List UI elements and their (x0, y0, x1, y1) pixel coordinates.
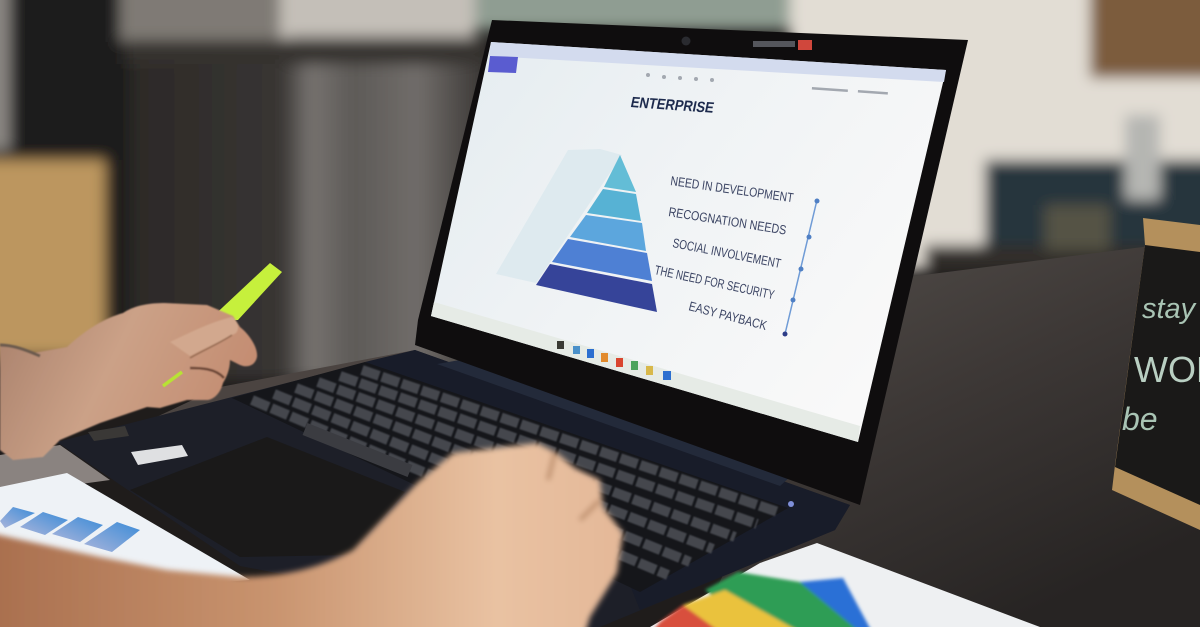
pyramid labels: NEED IN DEVELOPMENT (670, 173, 795, 205)
slide title: ENTERPRISE (629, 94, 716, 117)
left hand (0, 303, 257, 460)
space bar (305, 429, 410, 471)
webcam strip (682, 36, 812, 50)
screen (431, 42, 946, 442)
hinge strip (437, 360, 790, 486)
laptop lid (415, 20, 968, 505)
pyramid labels: THE NEED FOR SECURITY (653, 262, 776, 302)
taskbar (431, 302, 860, 442)
pyramid labels (653, 173, 795, 333)
trackpad (130, 437, 405, 557)
right hand and arm (0, 443, 623, 627)
pyramid ghost backdrop (496, 149, 622, 283)
toolbar icons (646, 73, 888, 95)
pyramid labels: SOCIAL INVOLVEMENT (671, 235, 782, 271)
browser top bar (489, 42, 946, 82)
pyramid labels: RECOGNATION NEEDS (668, 204, 788, 238)
chalkboard sign: be (1122, 401, 1158, 437)
table surface (700, 240, 1200, 627)
sticker labels (131, 445, 188, 465)
keyboard keys (252, 370, 778, 575)
vertical timeline (782, 198, 820, 336)
pen (207, 263, 282, 322)
pyramid labels: EASY PAYBACK (687, 298, 769, 333)
power light (788, 501, 794, 507)
pyramid (536, 155, 657, 312)
paper charts on desk (0, 473, 1040, 627)
laptop base (57, 350, 850, 627)
chalkboard sign (1112, 218, 1200, 530)
chalkboard sign: stay (1142, 293, 1197, 325)
taskbar app icons (557, 341, 671, 380)
